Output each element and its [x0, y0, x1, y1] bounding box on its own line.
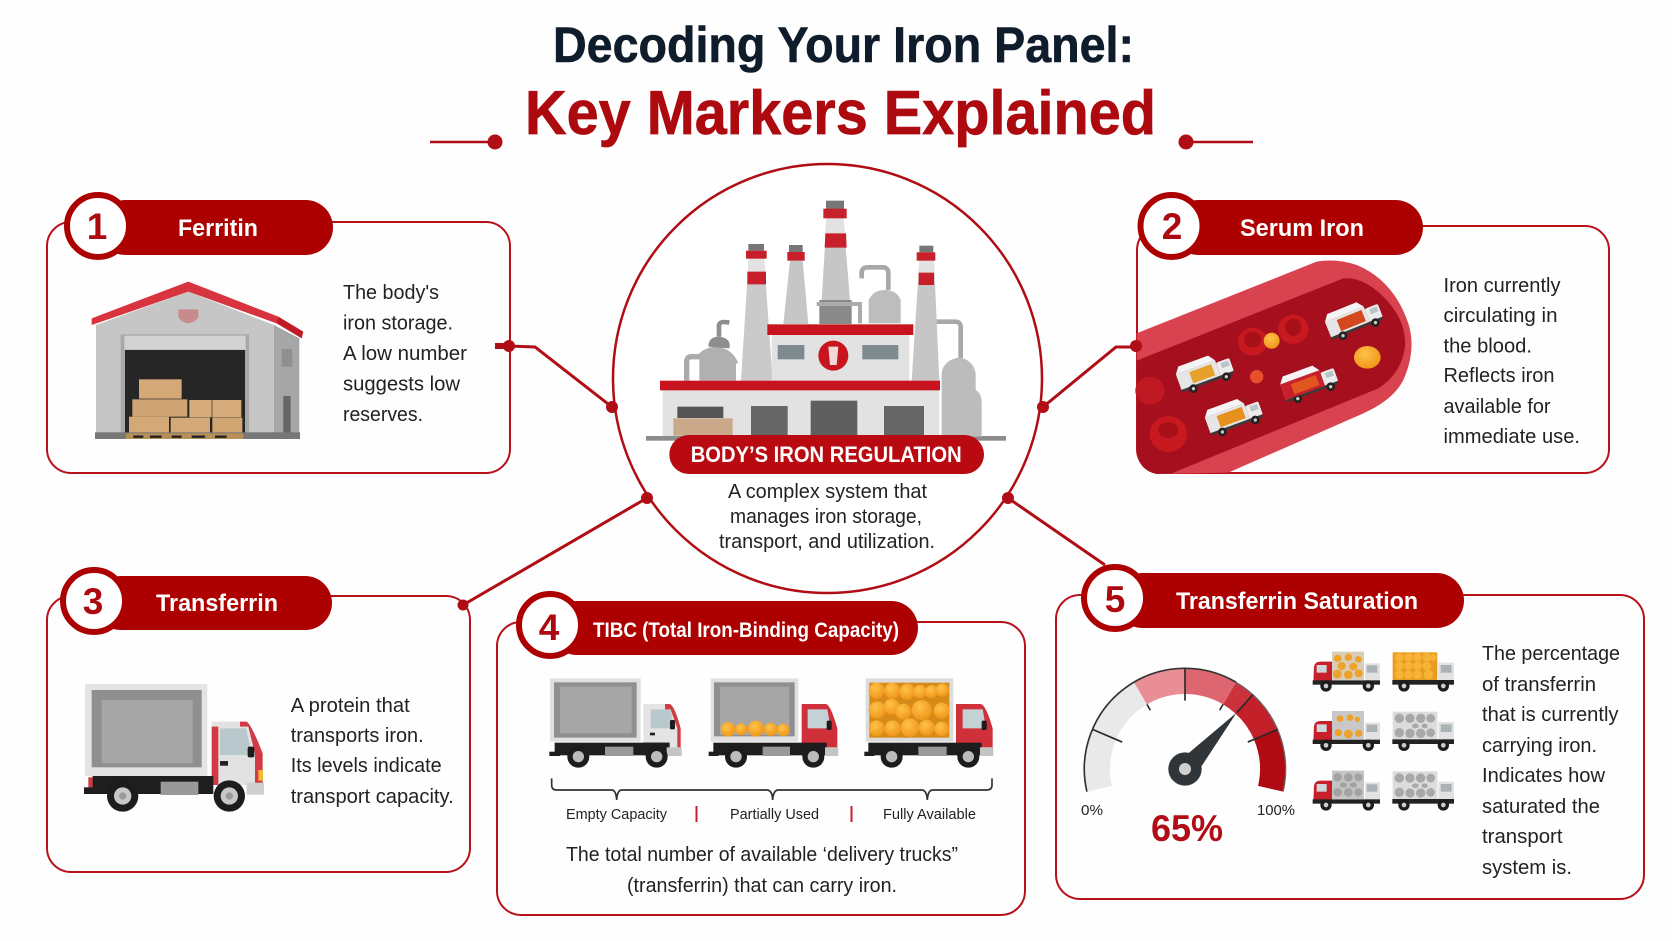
header: TIBC: 4 [539, 607, 560, 648]
text: TIBC description [566, 843, 958, 897]
header: Ferritin: Ferritin [178, 215, 258, 242]
text: Ferritin description: A low number [343, 342, 467, 365]
text: Ferritin description: iron storage. [343, 312, 453, 334]
panel 3: Transferrin [47, 570, 470, 872]
text: saturation description: of transferrin [1482, 673, 1596, 696]
text: TIBC description: The total number of available ‘delivery trucks” [566, 843, 958, 866]
text: Transferrin description: Its levels indicate [291, 754, 442, 777]
text: saturation description: The percentage [1482, 642, 1620, 665]
panel 4: TIBC [497, 594, 1025, 915]
panel 3 connector dot [458, 600, 468, 610]
text: Transferrin description: A protein that [291, 694, 410, 717]
row 2 trucks [1313, 711, 1454, 751]
title: Key Markers Explained [525, 79, 1156, 148]
gauge labels [1081, 802, 1295, 849]
truck labels: Empty Capacity [566, 806, 667, 823]
text: saturation description [1482, 642, 1620, 879]
header: TIBC: TIBC (Total Iron-Binding Capacity) [593, 618, 899, 642]
header: Ferritin [67, 195, 333, 257]
central description: A complex system that [728, 480, 927, 503]
central description: transport, and utilization. [719, 530, 935, 553]
header: Transferrin [63, 570, 332, 632]
text: Ferritin description: The body's [343, 281, 439, 304]
text: Serum Iron description: Reflects iron [1444, 364, 1554, 387]
truck: fully available [864, 678, 993, 768]
text: Serum Iron description: Iron currently [1444, 274, 1561, 297]
connector lines [463, 343, 1136, 605]
text: Serum Iron description: available for [1444, 395, 1551, 418]
text: Serum Iron description: immediate use. [1444, 425, 1580, 448]
gauge [1084, 668, 1286, 792]
text: saturation description: Indicates how [1482, 764, 1605, 787]
badge: body's iron regulation [669, 435, 984, 474]
header: TIBC [519, 594, 918, 656]
text: Transferrin description [291, 694, 454, 808]
header: Transferrin Saturation [1084, 567, 1464, 629]
text: saturation description: system is. [1482, 856, 1572, 879]
text: Ferritin description: suggests low [343, 372, 460, 396]
gauge labels: 0% [1081, 802, 1103, 819]
header: Transferrin: Transferrin [156, 590, 278, 617]
icon: blood vessel with trucks [1135, 261, 1412, 474]
central description [719, 480, 935, 553]
text: saturation description: that is currently [1482, 703, 1619, 726]
panel 1: Ferritin [47, 195, 510, 473]
text: Ferritin description [343, 281, 467, 426]
panel: central body's iron regulation [613, 164, 1042, 593]
icon: warehouse [92, 282, 303, 439]
header: Transferrin: 3 [83, 581, 103, 622]
text: saturation description: transport [1482, 825, 1563, 848]
panel 5: Transferrin Saturation [1056, 567, 1644, 899]
text: Serum Iron description [1444, 274, 1580, 448]
row 3 trucks [1313, 771, 1454, 811]
text: Transferrin description: transports iron. [291, 724, 424, 747]
header: Transferrin Saturation: Transferrin Saturation [1176, 588, 1418, 615]
row 1 trucks [1313, 652, 1454, 692]
truck: empty capacity [549, 678, 682, 768]
title [430, 17, 1253, 150]
panel 2: Serum Iron [1130, 195, 1609, 474]
badge: body's iron regulation: BODY’S IRON REGULATION [691, 442, 962, 467]
truck labels: Fully Available [883, 806, 976, 823]
truck: partially used [709, 678, 838, 768]
truck grid: saturation [1313, 652, 1454, 811]
gauge labels: 65% [1151, 808, 1223, 849]
text: Ferritin description: reserves. [343, 403, 423, 426]
central description: manages iron storage, [730, 505, 922, 528]
connector dots [503, 340, 1049, 504]
header: Serum Iron: Serum Iron [1240, 215, 1364, 242]
text: saturation description: carrying iron. [1482, 734, 1597, 757]
truck labels [566, 806, 976, 823]
header: Ferritin: 1 [87, 206, 107, 247]
brace [552, 778, 992, 800]
text: Serum Iron description: the blood. [1444, 334, 1532, 358]
header: Serum Iron [1140, 195, 1423, 257]
text: TIBC description: (transferrin) that can carry iron. [627, 874, 897, 897]
header: Transferrin Saturation: 5 [1105, 579, 1125, 620]
header: Serum Iron: 2 [1162, 206, 1182, 247]
gauge labels: 100% [1257, 802, 1295, 819]
text: Serum Iron description: circulating in [1444, 304, 1558, 327]
truck labels: Partially Used [730, 806, 819, 823]
title: Decoding Your Iron Panel: [553, 17, 1134, 73]
icon: empty truck [84, 684, 264, 812]
icon: factory [646, 201, 1006, 441]
text: saturation description: saturated the [1482, 795, 1600, 818]
text: Transferrin description: transport capacity. [291, 785, 454, 808]
trucks: empty, partial, full [549, 678, 993, 800]
panel 2 border dot [1130, 340, 1142, 352]
